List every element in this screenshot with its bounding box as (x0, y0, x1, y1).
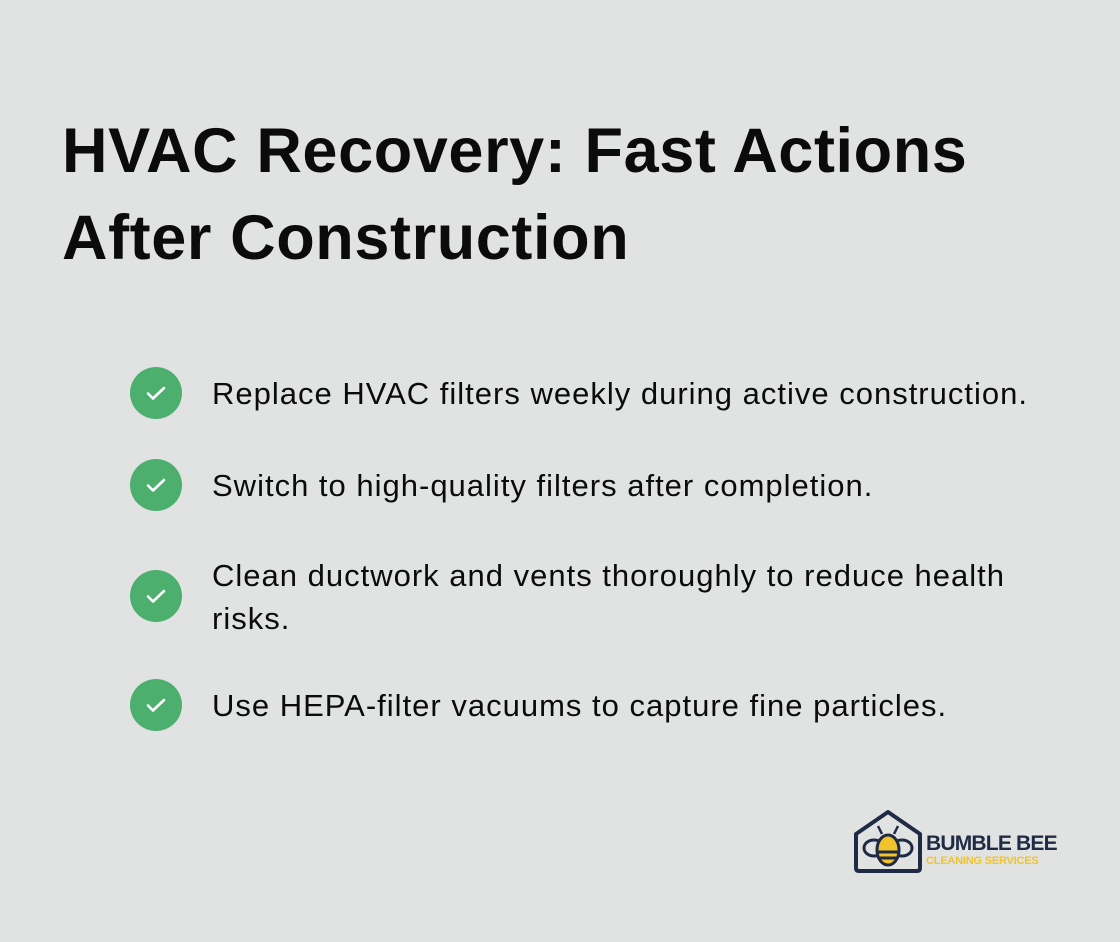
icon: bee house (854, 810, 922, 873)
icon: check (130, 459, 182, 511)
text: Clean ductwork and vents thoroughly to reduce health (212, 558, 1005, 593)
icon: check (130, 367, 182, 419)
title (62, 116, 967, 273)
item 2 (130, 459, 873, 511)
item 1 (130, 367, 1028, 419)
text (212, 558, 1005, 636)
item 3 (130, 558, 1005, 636)
icon: check (130, 570, 182, 622)
text: risks. (212, 601, 290, 636)
icon: check (130, 679, 182, 731)
text: Use HEPA-filter vacuums to capture fine particles. (212, 688, 947, 723)
item 4 (130, 679, 947, 731)
logo text: BUMBLE BEE (926, 832, 1057, 855)
logo: CLEANING SERVICES (926, 855, 1039, 867)
logo (854, 810, 1057, 873)
text: Replace HVAC filters weekly during active construction. (212, 376, 1028, 411)
title: After Construction (62, 203, 629, 273)
text: Switch to high-quality filters after completion. (212, 468, 873, 503)
title: HVAC Recovery: Fast Actions (62, 116, 967, 186)
